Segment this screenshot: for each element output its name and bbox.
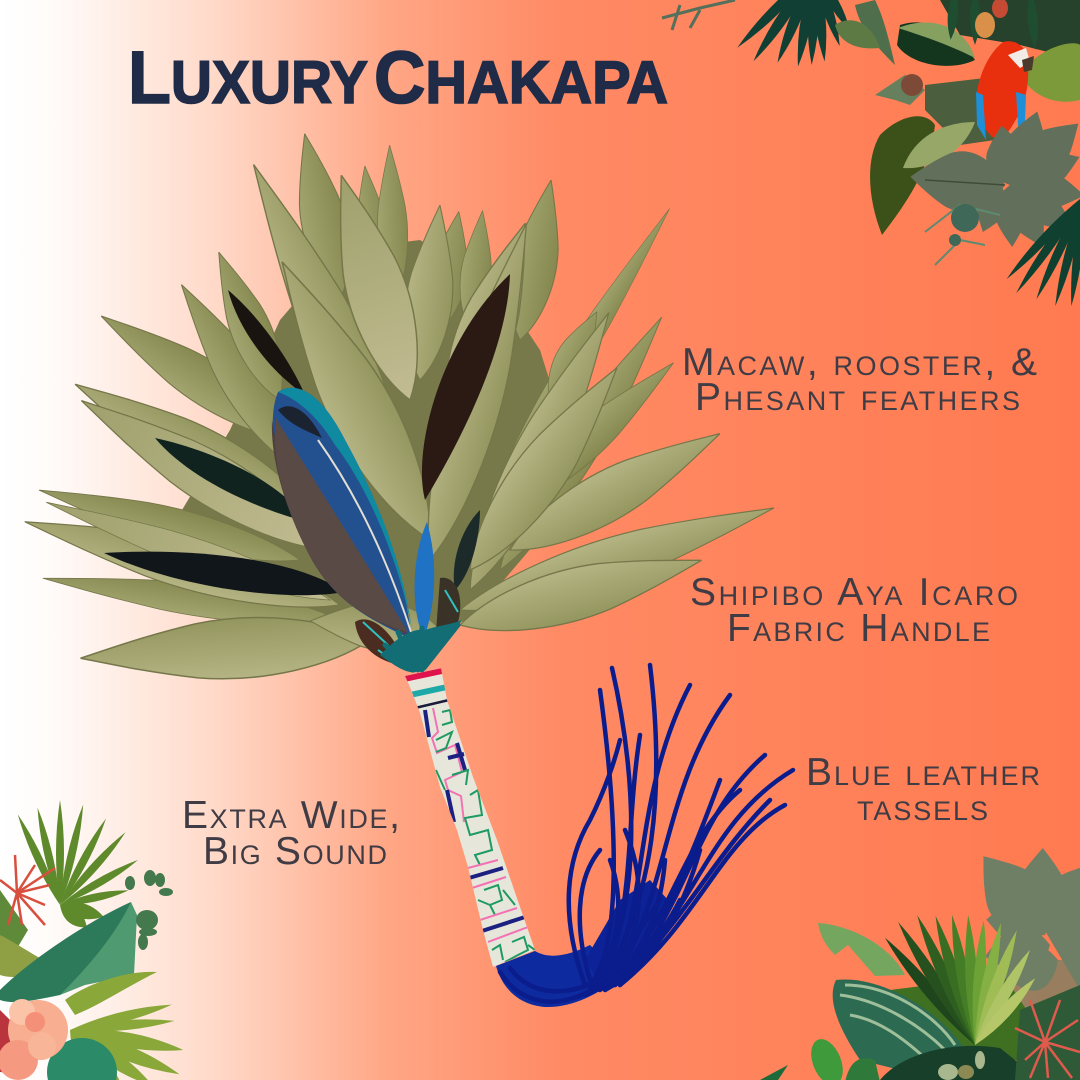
text: handle label — [690, 571, 1018, 650]
text: width label — [182, 794, 400, 873]
text: width label: Extra Wide, — [182, 794, 400, 837]
icon: top-right tropical foliage — [662, 0, 1080, 307]
text: tassels label: tassels — [857, 786, 988, 829]
text: tassels label: Blue leather — [806, 751, 1040, 794]
text: tassels label — [806, 751, 1040, 829]
icon: peach flower — [0, 999, 68, 1080]
text: feathers label — [682, 341, 1037, 419]
text: handle label: Fabric Handle — [727, 607, 990, 650]
icon: bottom-left tropical foliage — [0, 800, 185, 1080]
icon: blue leather tassels — [496, 665, 793, 1007]
text: feathers label: Macaw, rooster, & — [682, 341, 1037, 384]
icon: parrot — [976, 41, 1034, 148]
icon: blue macaw feather — [272, 388, 434, 640]
icon: bottom-right tropical foliage — [760, 838, 1080, 1080]
text: feathers label: Phesant feathers — [695, 376, 1020, 419]
back leaves — [35, 129, 686, 636]
text: width label: Big Sound — [203, 830, 387, 873]
title: LUXURY — [128, 36, 368, 119]
title: CHAKAPA — [374, 36, 668, 119]
icon: teal feather tuft — [355, 578, 462, 672]
text: handle label: Shipibo Aya Icaro — [690, 571, 1018, 614]
title — [128, 36, 668, 119]
icon: beaded fabric handle — [404, 668, 535, 967]
icon: dark feathers — [104, 274, 510, 595]
front leaves — [41, 167, 439, 614]
mid leaves — [19, 153, 781, 632]
icon: dried leaf fan — [19, 129, 781, 688]
